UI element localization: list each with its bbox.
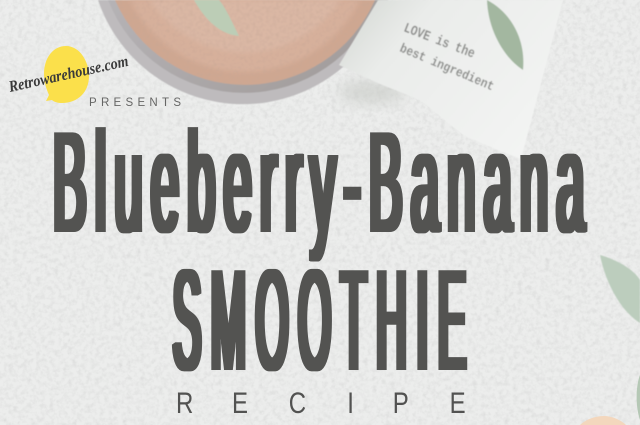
second leaf sliver [637, 375, 640, 420]
napkin text: LOVE is the [401, 21, 477, 63]
napkin text: best ingredient [397, 41, 496, 94]
shadow beneath napkin [338, 80, 406, 104]
napkin with printed text [339, 0, 563, 159]
leaf at right edge [600, 255, 640, 323]
peach at bottom [580, 416, 626, 425]
icon: leaf on napkin [487, 0, 523, 70]
presents label: PRESENTS [89, 97, 181, 109]
logo: Retrowarehouse.com [6, 46, 130, 103]
logo wordmark: Retrowarehouse.com [6, 53, 130, 96]
icon: bay leaf on plate [194, 0, 239, 36]
plate with bay leaf [98, 0, 388, 104]
subtitle: recipe: RECIPE [176, 385, 466, 420]
napkin text [397, 21, 496, 94]
title line 2: SMOOTHIE [173, 242, 466, 400]
title line 1: Blueberry-Banana [53, 103, 585, 262]
icon: yellow speech bubble [44, 46, 89, 103]
